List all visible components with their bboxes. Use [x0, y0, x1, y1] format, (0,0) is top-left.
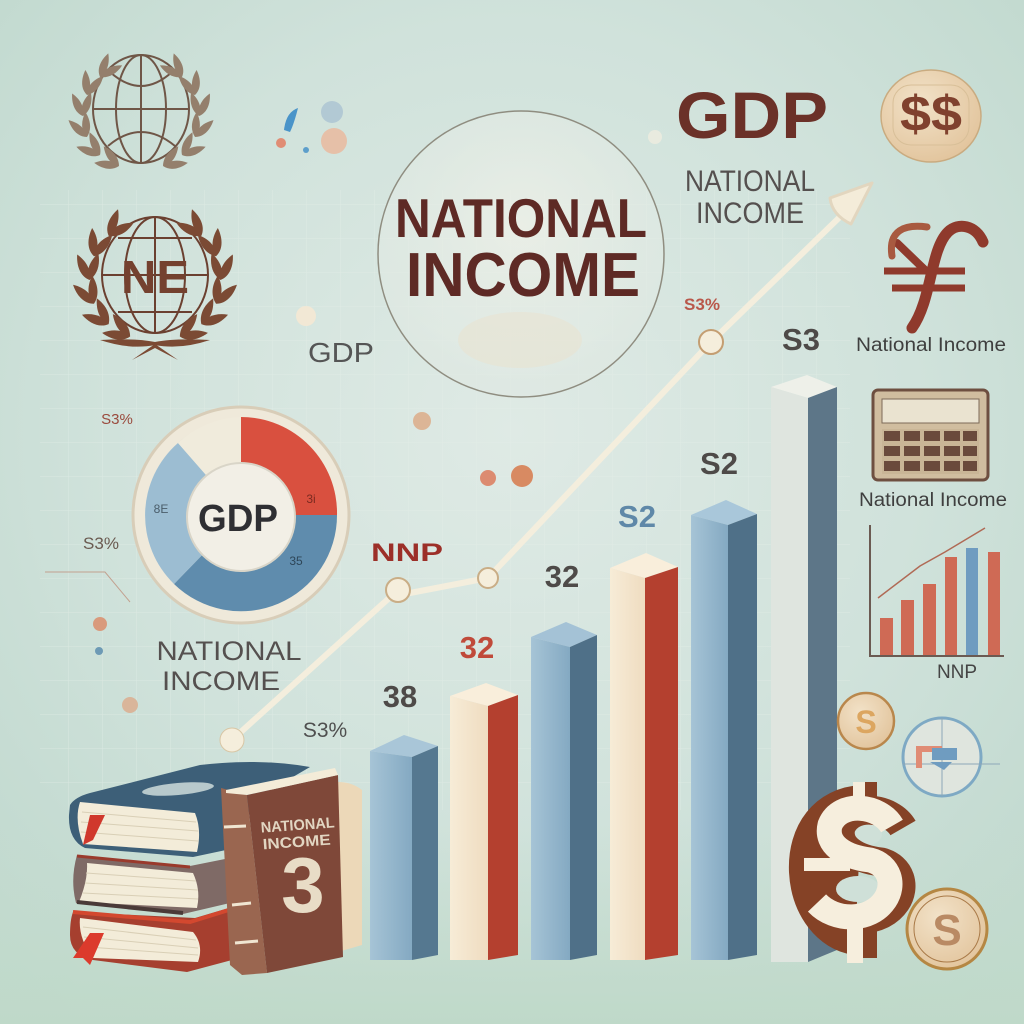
trend arrow line — [220, 183, 872, 752]
bar 3 — [531, 622, 597, 960]
decorative paint splashes — [93, 101, 662, 713]
heading: GDP: GDP — [676, 78, 828, 152]
donut chart — [133, 407, 349, 623]
book: National Income 3: NATIONAL — [260, 814, 335, 837]
donut chart: GDP — [198, 498, 278, 540]
bar 6 — [771, 375, 837, 962]
label: NNP small: NNP — [937, 662, 977, 683]
icon: target circle — [903, 718, 1000, 796]
icon: large dollar sign — [793, 782, 903, 963]
bar 4 — [610, 553, 678, 960]
bar value labels: 32 — [545, 559, 579, 594]
icon: dollar coin top right — [881, 70, 981, 162]
stack of books — [69, 762, 362, 975]
bar value labels: S3 — [782, 322, 820, 357]
small bar chart — [870, 525, 1004, 656]
bar 5 — [691, 500, 757, 960]
label: National Income left: NATIONAL — [156, 636, 302, 666]
bar value labels — [383, 322, 820, 714]
label: NNP: NNP — [371, 539, 443, 567]
donut chart: 8E — [154, 502, 168, 516]
title circle: National Income — [378, 111, 664, 397]
bar value labels: 32 — [460, 630, 494, 665]
book: bottom red — [70, 907, 232, 972]
label: National Income top: NATIONAL — [685, 165, 815, 198]
icon: coin bottom right — [907, 889, 987, 969]
book: National Income 3 — [221, 768, 343, 975]
book: National Income 3: INCOME — [262, 832, 331, 853]
label: 53% lower: S3% — [303, 719, 347, 742]
donut chart: 3i — [306, 492, 316, 506]
icon: yen symbol — [884, 226, 983, 328]
bar value labels: 38 — [383, 679, 417, 714]
label: National Income top: INCOME — [696, 197, 804, 230]
book: top blue — [69, 762, 310, 857]
label: 53% left of donut: S3% — [83, 534, 119, 553]
label: National Income right 2: National Income — [859, 490, 1007, 511]
icon: calculator — [873, 390, 988, 480]
label: 53% top on line: S3% — [684, 295, 720, 314]
label: National Income top — [685, 165, 815, 230]
bar value labels: S2 — [700, 446, 738, 481]
icon: dollar coin top right: $$ — [900, 86, 962, 142]
icon: small coin: S — [855, 704, 877, 740]
donut chart: 35 — [289, 554, 303, 568]
icon: coin bottom right: S — [932, 906, 962, 955]
bar 1 — [370, 735, 438, 960]
book: National Income 3: 3 — [281, 841, 325, 929]
bar 2 — [450, 683, 518, 960]
bar value labels: S2 — [618, 499, 656, 534]
emblem: NE laurel wreath: NE — [121, 251, 189, 303]
emblem: NE laurel wreath — [70, 208, 240, 360]
label: National Income left — [156, 636, 302, 696]
label: 53% left of donut — [45, 534, 130, 602]
label: 53% near donut top: S3% — [101, 411, 133, 428]
label: National Income left: INCOME — [162, 666, 280, 696]
label: GDP mid: GDP — [308, 337, 374, 368]
bar chart — [370, 375, 837, 962]
label: National Income right 1: National Income — [856, 335, 1006, 356]
icon: small coin — [838, 693, 894, 749]
title circle: National Income: INCOME — [406, 241, 640, 310]
emblem: globe with laurel wreath — [65, 52, 217, 170]
book: middle brown — [73, 855, 230, 914]
title circle: National Income: NATIONAL — [395, 187, 647, 249]
